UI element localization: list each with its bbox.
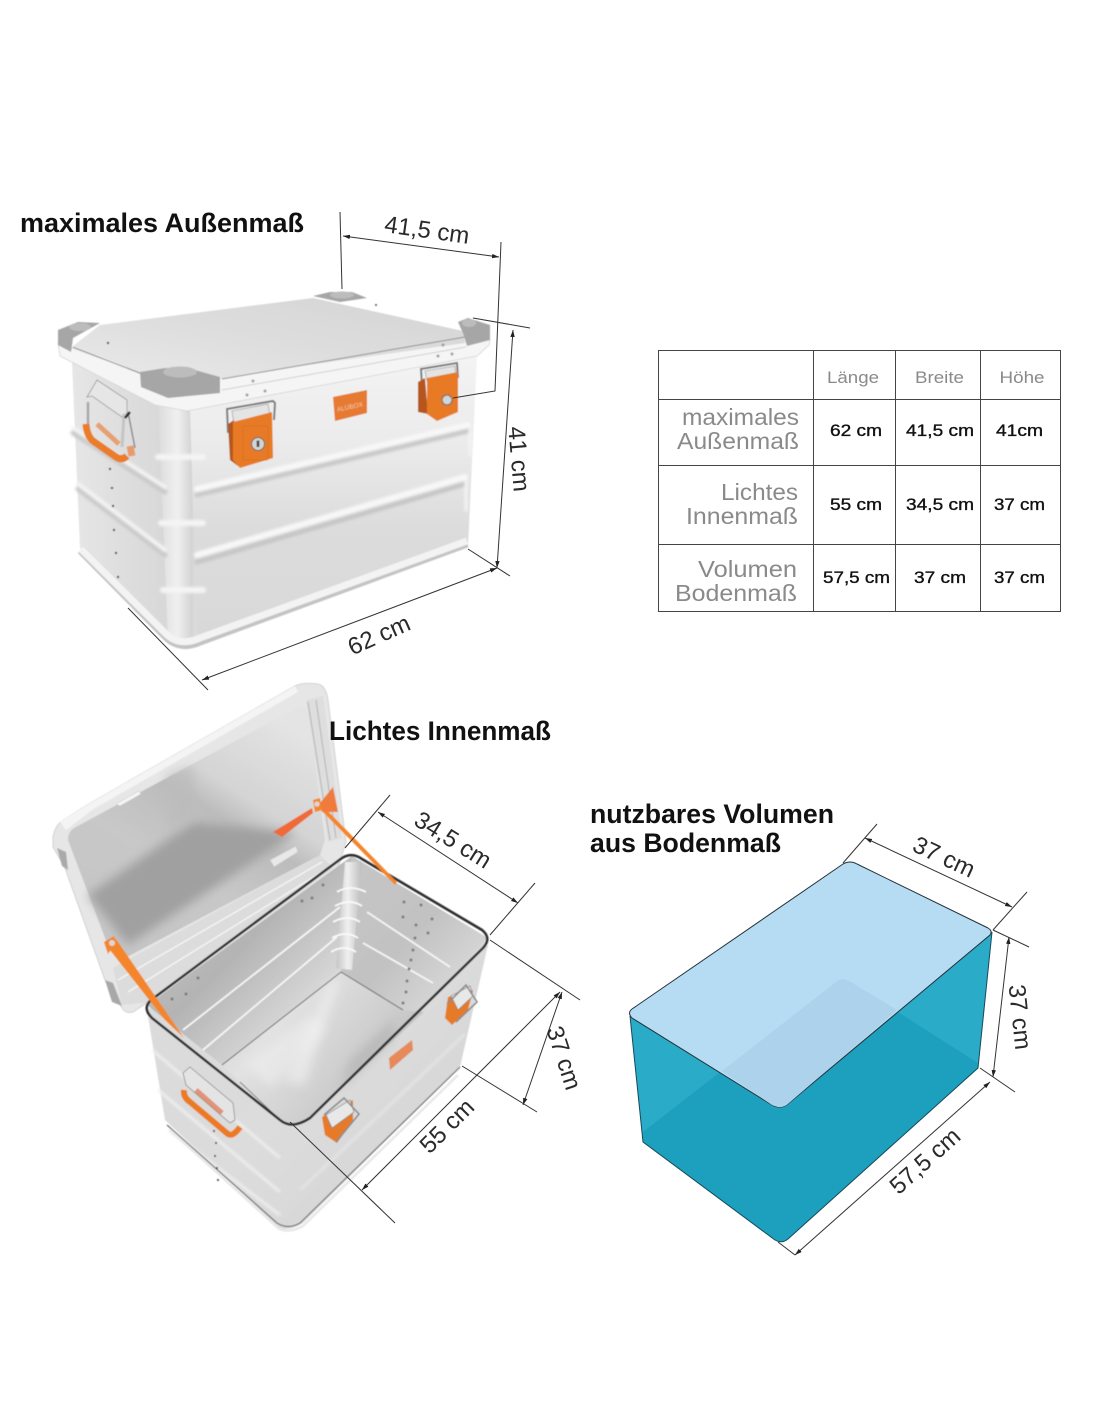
row values: 62 cm xyxy=(830,421,882,440)
front face xyxy=(183,355,477,645)
dimension: 34,5 cm: 34,5 cm xyxy=(409,806,496,874)
mount holes xyxy=(170,884,434,1004)
interior wall ribs xyxy=(183,907,450,1050)
open lid xyxy=(53,683,346,1012)
row values: 37 cm xyxy=(914,568,966,587)
dimension: 55 cm xyxy=(290,940,580,1223)
row values: 34,5 cm xyxy=(906,495,974,514)
heading: nutzbares Volumen aus Bodenmaß: nutzbares Volumen xyxy=(590,799,834,829)
dimension: 37 cm width: 37 cm xyxy=(908,831,979,883)
interior right wall xyxy=(341,856,488,1012)
table grid xyxy=(658,350,1061,612)
row labels: maximales xyxy=(682,404,799,430)
left carry handle xyxy=(86,380,135,459)
right latch xyxy=(445,985,477,1025)
dimension: 62 cm: 62 cm xyxy=(344,610,415,661)
body ribs xyxy=(73,425,470,590)
lid rim xyxy=(58,335,490,411)
heading: maximales Außenmaß: maximales Außenmaß xyxy=(20,208,304,238)
handle rivets xyxy=(213,1130,219,1181)
corner knobs xyxy=(69,292,476,378)
top face xyxy=(630,862,991,1107)
floor edge lines xyxy=(222,972,403,1065)
lid flange xyxy=(113,855,333,1005)
lid hinge strip xyxy=(306,696,342,842)
rounded corner strip xyxy=(158,398,197,640)
interior back wall xyxy=(147,856,352,1065)
outer body xyxy=(147,860,488,1229)
dimension: 37 cm width xyxy=(843,824,1027,930)
dimension: 37 cm height: 37 cm xyxy=(1003,983,1036,1051)
column headers xyxy=(827,368,1044,387)
row values: 55 cm xyxy=(830,495,882,514)
row labels: Volumen xyxy=(698,556,797,582)
base trim xyxy=(81,543,467,645)
lid inner panel xyxy=(68,707,325,957)
lid rivets xyxy=(107,304,454,396)
closed aluminium box xyxy=(58,292,490,645)
table of dimensions xyxy=(658,350,1061,612)
heading: nutzbares Volumen aus Bodenmaß: aus Bodenmaß xyxy=(590,828,781,858)
dimension: 37 cm inner height: 37 cm xyxy=(541,1023,586,1093)
front left latch xyxy=(227,401,275,468)
dimension: 41 cm: 41 cm xyxy=(502,425,535,493)
brand plate: ALUBOX xyxy=(336,401,364,414)
lid clips xyxy=(116,791,141,806)
row values: 41,5 cm xyxy=(906,421,974,440)
rubber seal xyxy=(147,855,487,1125)
side faces xyxy=(630,866,992,1242)
column headers: Länge xyxy=(827,368,879,387)
brand plate xyxy=(389,1040,413,1070)
dimension: 62 cm xyxy=(128,568,497,690)
heading: nutzbares Volumen aus Bodenmaß xyxy=(590,799,834,858)
dimension: 41,5 cm: 41,5 cm xyxy=(383,211,471,250)
dimension: 37 cm inner height xyxy=(462,992,586,1112)
see-through overlap xyxy=(722,979,897,1107)
dimension: 55 cm: 55 cm xyxy=(415,1094,480,1159)
heading: Lichtes Innenmaß: Lichtes Innenmaß xyxy=(329,716,551,746)
dimension: 57,5 cm xyxy=(778,1082,990,1255)
dimension: 37 cm height xyxy=(980,930,1036,1092)
lid corners xyxy=(58,292,490,398)
rivets on the side xyxy=(109,468,119,578)
row values: 41cm xyxy=(996,421,1043,440)
floor xyxy=(643,979,978,1242)
orange lid straps xyxy=(104,787,397,1038)
row labels: Lichtes xyxy=(721,479,798,505)
row values xyxy=(823,421,1045,587)
open aluminium box xyxy=(53,683,488,1231)
lid top plate xyxy=(73,298,465,377)
dimension: 34,5 cm xyxy=(345,795,535,935)
dimension: 57,5 cm: 57,5 cm xyxy=(885,1123,966,1200)
side handle xyxy=(183,1067,240,1135)
row labels: Bodenmaß xyxy=(675,580,797,606)
row values: 37 cm xyxy=(994,568,1045,587)
blue volume block xyxy=(630,862,992,1242)
floor streaks xyxy=(245,975,396,1090)
lid reflection xyxy=(88,822,296,945)
dimension: 41 cm xyxy=(468,318,535,576)
left side face xyxy=(72,362,187,645)
row labels: Außenmaß xyxy=(677,428,799,454)
corner column xyxy=(336,862,362,970)
dimension: 41,5 cm xyxy=(340,211,501,398)
outer body ribs xyxy=(152,1034,465,1215)
row labels xyxy=(675,404,799,606)
block outline xyxy=(630,932,992,1242)
column headers: Höhe xyxy=(1000,368,1044,387)
row values: 57,5 cm xyxy=(823,568,890,587)
brand plate xyxy=(333,390,367,421)
row labels: Innenmaß xyxy=(686,503,798,529)
front latch xyxy=(322,1098,359,1143)
corner ribs xyxy=(331,888,366,952)
front right latch xyxy=(418,363,458,421)
row values: 37 cm xyxy=(994,495,1045,514)
floor xyxy=(222,972,424,1126)
column headers: Breite xyxy=(915,368,964,387)
